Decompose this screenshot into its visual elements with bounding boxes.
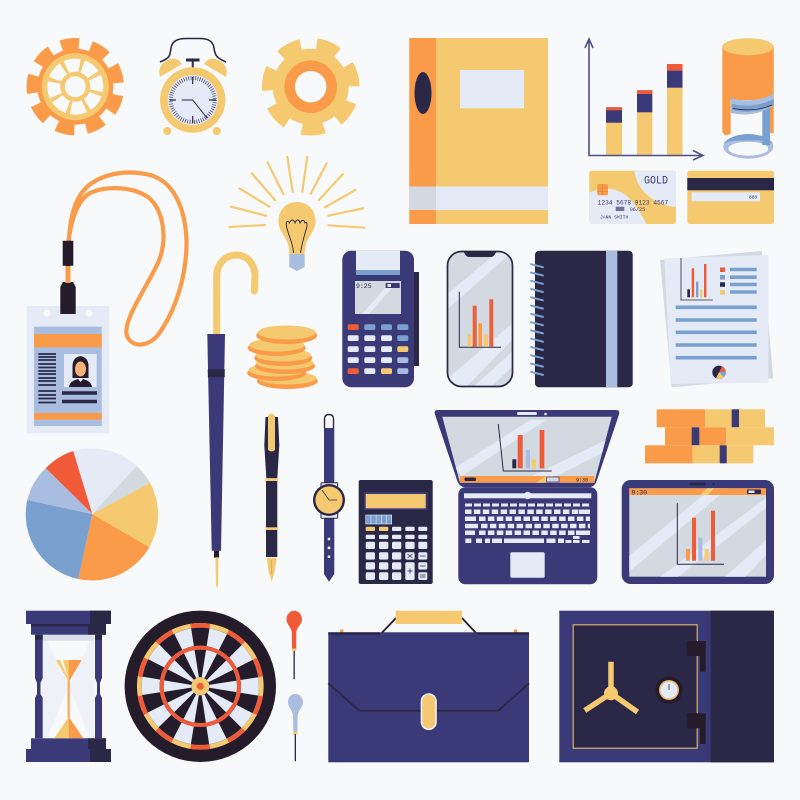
combination dial	[656, 676, 682, 704]
icon: safe	[559, 611, 774, 762]
treble ring	[162, 648, 239, 725]
icon: gold credit card front: GOLD	[644, 176, 668, 188]
icon: report document	[660, 251, 773, 387]
laptop base	[458, 487, 597, 584]
icon: umbrella	[207, 255, 255, 587]
stamp wheel	[731, 94, 774, 114]
ID photo	[64, 354, 97, 387]
icon: stack of coins	[247, 326, 318, 389]
icon: briefcase	[328, 611, 529, 762]
laptop screen	[435, 410, 619, 487]
icon: hourglass	[26, 611, 111, 762]
laptop screen: 9:30	[576, 478, 588, 484]
icon: alarm clock	[159, 38, 227, 135]
icon: calculator	[359, 480, 433, 584]
door hinges	[687, 641, 706, 744]
double ring	[139, 625, 261, 747]
outer sectors	[151, 637, 250, 736]
icon: gold bars	[645, 409, 774, 463]
mini pie	[712, 366, 726, 379]
barcode	[38, 354, 56, 402]
icon: fountain pen	[264, 414, 279, 582]
stamp post	[762, 108, 770, 145]
inner sectors	[177, 663, 223, 709]
icon: orange gear with wheel	[22, 33, 129, 140]
icon: gold credit card front: JANN SMITH	[600, 214, 628, 220]
icon: wristwatch	[313, 414, 345, 582]
ID card	[34, 327, 102, 426]
icon: gold credit card back: 888	[749, 194, 757, 200]
terminal screen: 9:25	[356, 283, 372, 290]
icon: blue dart	[288, 694, 303, 761]
touchpad	[510, 552, 545, 578]
icon: pie chart	[26, 448, 158, 580]
lanyard strap	[68, 173, 187, 345]
badge holder	[27, 306, 109, 433]
bullseye	[191, 677, 209, 695]
icon: laptop with chart	[435, 410, 619, 584]
icon: dartboard	[125, 611, 276, 762]
icon: ID badge on lanyard	[27, 173, 187, 433]
safe handle	[585, 662, 638, 712]
icon: tablet with chart: 9:30	[632, 490, 647, 497]
icon: light bulb with rays	[229, 157, 364, 271]
icon: smartphone with chart	[446, 250, 514, 388]
icon: gold credit card front: 06/25	[630, 206, 645, 213]
icon: gold credit card back	[687, 171, 774, 224]
icon: yellow gear	[258, 34, 364, 140]
badge clip	[60, 241, 76, 314]
icon: red dart	[286, 611, 302, 679]
keypad	[348, 324, 408, 374]
icon: gold credit card front: 1234 5678 9123 4567	[598, 200, 669, 207]
calculator keys	[366, 527, 427, 580]
icon: gold credit card front	[588, 170, 677, 225]
ring base	[723, 135, 773, 159]
icon: tablet with chart	[622, 480, 774, 584]
icon: spiral notebook	[531, 251, 633, 387]
keyboard	[465, 505, 590, 543]
icon: POS card terminal	[342, 251, 419, 387]
icon: round stamp	[722, 38, 774, 159]
orange body	[722, 47, 774, 136]
chart: stacked bar chart	[585, 39, 703, 160]
icon: binder folder	[409, 38, 548, 224]
